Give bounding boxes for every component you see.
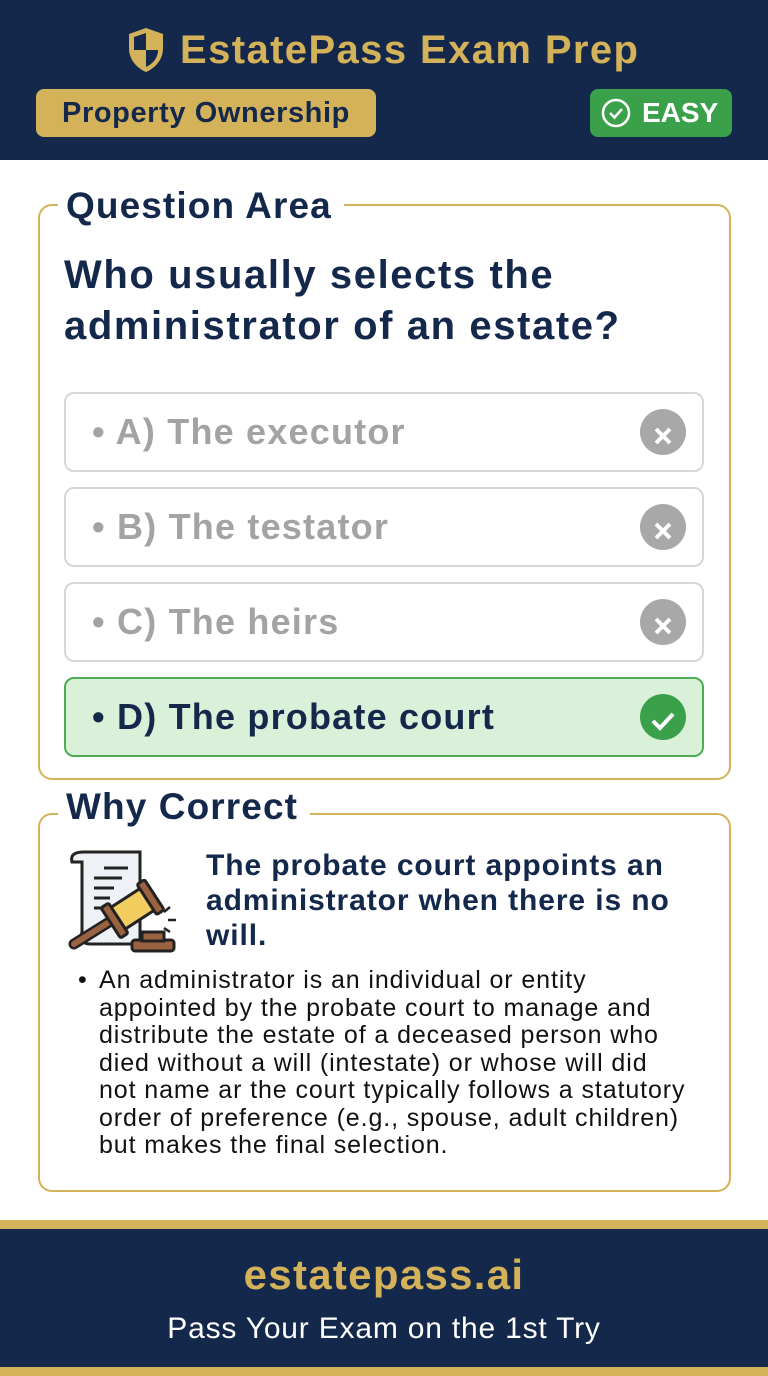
question text: Who usually selects the (64, 253, 554, 297)
badge: category (36, 89, 376, 137)
option B (64, 487, 704, 567)
badge: difficulty: EASY (642, 97, 718, 128)
explanation body: • (78, 966, 88, 994)
option C (64, 582, 704, 662)
footer (0, 1220, 768, 1376)
title: EstatePass Exam Prep (180, 28, 639, 72)
panel: why correct (38, 813, 731, 1192)
question text (64, 253, 621, 348)
footer tagline: Pass Your Exam on the 1st Try (167, 1312, 601, 1345)
explanation body: An administrator is an individual or entity (99, 966, 587, 994)
option C: • C) The heirs (92, 601, 339, 642)
option B: • B) The testator (92, 506, 389, 547)
option D correct (64, 677, 704, 757)
question text: administrator of an estate? (64, 304, 621, 348)
explanation body: order of preference (e.g., spouse, adult children) (99, 1104, 679, 1132)
explanation headline: The probate court appoints an administrator when there is no will. (206, 849, 670, 952)
icon: gavel and scroll (68, 850, 176, 952)
explanation body: died without a will (intestate) or whose will did (99, 1048, 648, 1076)
badge: difficulty (590, 89, 732, 137)
icon: check circle (602, 98, 630, 128)
option D correct: • D) The probate court (92, 696, 495, 737)
explanation body: but makes the final selection. (99, 1131, 448, 1159)
explanation body: distribute the estate of a deceased person who (99, 1021, 659, 1049)
heading: why correct: Why Correct (66, 786, 298, 827)
option A: • A) The executor (92, 411, 406, 452)
header (0, 0, 768, 160)
footer url: estatepass.ai (244, 1251, 524, 1298)
explanation body: not name ar the court typically follows a statutory (99, 1076, 685, 1104)
explanation body (78, 966, 685, 1159)
badge: category: Property Ownership (62, 97, 350, 129)
option A (64, 392, 704, 472)
explanation body: appointed by the probate court to manage and (99, 994, 651, 1022)
panel: question area (38, 204, 731, 780)
heading: question area: Question Area (66, 185, 332, 226)
icon: shield (129, 28, 163, 72)
